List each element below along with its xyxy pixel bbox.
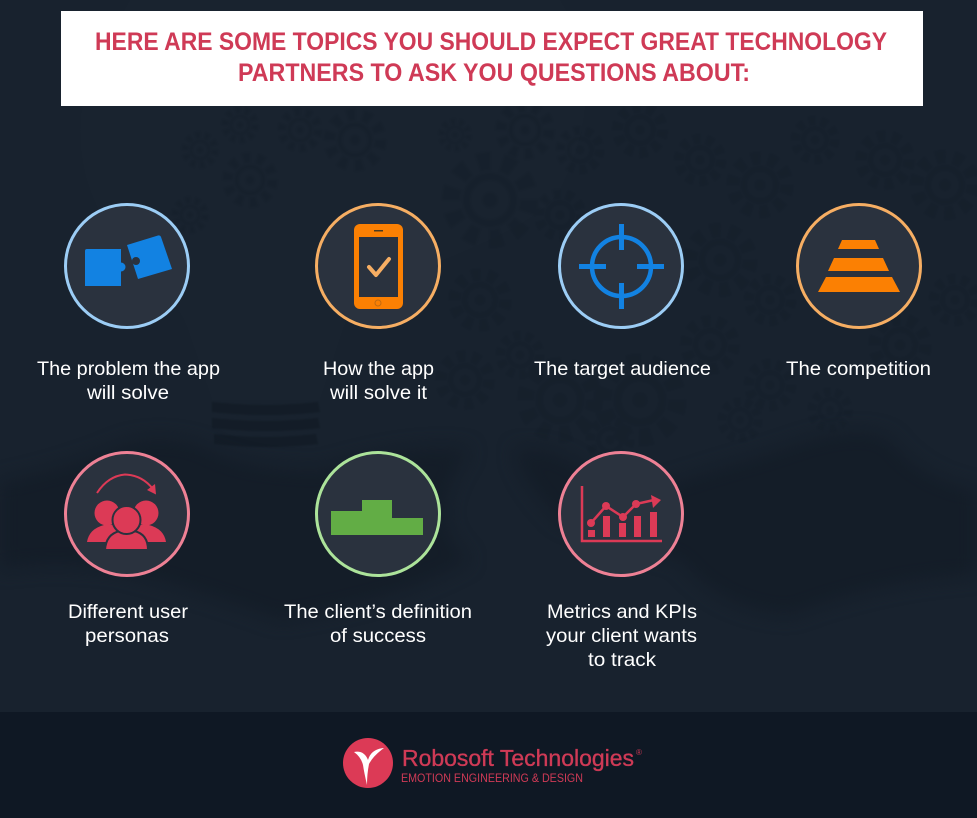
icon: user group with arrow <box>66 452 188 576</box>
brand name: Robosoft Technologies <box>402 745 634 771</box>
label <box>68 601 189 647</box>
title text: HERE ARE SOME TOPICS YOU SHOULD EXPECT GREAT TECHNOLOGY <box>95 28 887 56</box>
icon: phone with check <box>316 204 440 328</box>
title text <box>95 28 887 87</box>
label: The client’s definition <box>284 601 472 623</box>
label: to track <box>588 649 656 671</box>
title text: PARTNERS TO ASK YOU QUESTIONS ABOUT: <box>238 59 750 87</box>
item: different user personas <box>66 452 189 647</box>
label: How the app <box>323 358 434 380</box>
icon: stepped pyramid <box>798 204 920 328</box>
icon: crosshair target <box>560 204 682 328</box>
label <box>323 358 434 404</box>
label: Different user <box>68 601 189 623</box>
label <box>37 358 220 404</box>
icon: puzzle pieces <box>66 204 188 328</box>
footer logo <box>343 738 642 788</box>
label: The competition <box>786 358 931 380</box>
label <box>284 601 472 647</box>
item: how the app will solve it <box>316 204 440 404</box>
title banner <box>61 11 923 106</box>
tagline: EMOTION ENGINEERING & DESIGN <box>401 773 583 785</box>
icon: bar chart with trend arrow <box>560 452 682 576</box>
label: will solve <box>86 382 169 404</box>
item: the client's definition of success <box>284 452 472 647</box>
label: personas <box>85 625 169 647</box>
label: Metrics and KPIs <box>547 601 697 623</box>
label <box>546 601 697 671</box>
label: will solve it <box>329 382 428 404</box>
item: the target audience <box>534 204 711 380</box>
item: metrics and KPIs <box>546 452 697 671</box>
logo mark <box>343 738 393 788</box>
label: The problem the app <box>37 358 220 380</box>
registered mark: ® <box>636 748 642 757</box>
label: your client wants <box>546 625 697 647</box>
item: the problem the app will solve <box>37 204 220 404</box>
label: The target audience <box>534 358 711 380</box>
label: of success <box>330 625 426 647</box>
item: the competition <box>786 204 931 380</box>
icon: podium <box>316 452 440 576</box>
